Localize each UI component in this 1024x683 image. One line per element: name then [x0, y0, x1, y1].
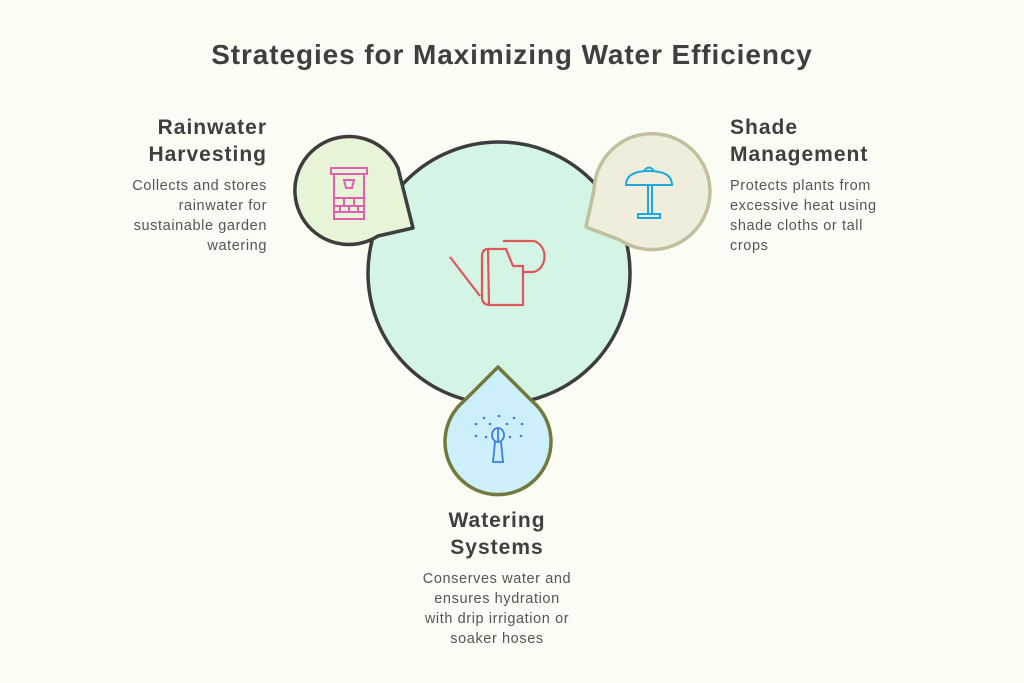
icon: umbrella table	[626, 168, 672, 218]
text: shade management: Shade	[730, 116, 798, 139]
text: rainwater harvesting: Collects and stores	[132, 178, 267, 194]
text: rainwater harvesting: rainwater for	[179, 198, 267, 214]
text: watering systems: ensures hydration	[434, 591, 560, 607]
icon: well	[331, 168, 367, 219]
main circle	[368, 142, 630, 404]
text: shade management: crops	[730, 238, 768, 254]
text: shade management: excessive heat using	[730, 198, 877, 214]
text: watering systems: Systems	[450, 536, 544, 559]
drop: watering systems	[445, 367, 551, 495]
text: watering systems	[423, 509, 571, 647]
title: Strategies for Maximizing Water Efficiency	[211, 39, 813, 70]
text: rainwater harvesting: Rainwater	[158, 116, 267, 139]
text: shade management: shade cloths or tall	[730, 218, 863, 234]
drop: shade management	[586, 134, 710, 250]
text: watering systems: Watering	[448, 509, 546, 532]
text: watering systems: soaker hoses	[450, 631, 544, 647]
text: watering systems: Conserves water and	[423, 571, 571, 587]
text: rainwater harvesting: Harvesting	[148, 143, 267, 166]
drop: rainwater harvesting	[295, 137, 413, 245]
icon: watering can	[450, 241, 545, 305]
text: shade management	[730, 116, 877, 254]
text: rainwater harvesting: sustainable garden	[134, 218, 267, 234]
text: rainwater harvesting	[132, 116, 267, 254]
text: shade management: Management	[730, 143, 868, 166]
text: shade management: Protects plants from	[730, 178, 871, 194]
icon: sprinkler	[475, 415, 523, 462]
text: rainwater harvesting: watering	[207, 238, 267, 254]
text: watering systems: with drip irrigation or	[425, 611, 569, 627]
